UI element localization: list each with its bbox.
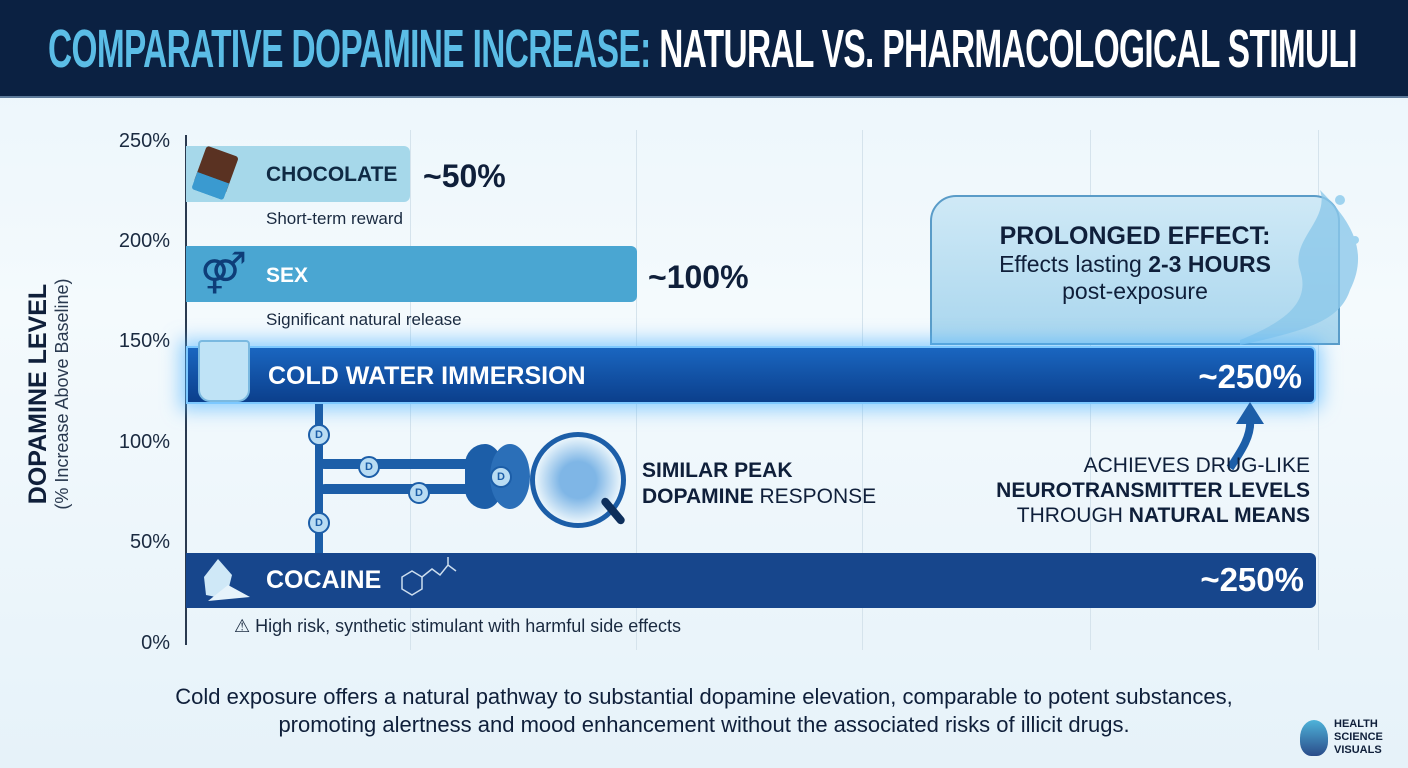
bar: cold water immersion: COLD WATER IMMERSION — [268, 362, 586, 390]
text: drug-like: NEUROTRANSMITTER LEVELS — [996, 479, 1310, 502]
icon: molecule — [401, 557, 456, 596]
bar: chocolate — [186, 146, 410, 202]
y axis: 250% — [119, 130, 170, 152]
icon: chocolate — [191, 146, 239, 200]
bar: cold water immersion: ~250% — [1198, 358, 1302, 395]
logo: VISUALS — [1334, 744, 1382, 756]
value: chocolate: ~50% — [423, 158, 506, 194]
bar: cocaine — [186, 553, 1316, 608]
bar: cocaine: ~250% — [1200, 561, 1304, 598]
y axis: 0% — [141, 632, 170, 654]
bar: sex: SEX — [266, 264, 308, 287]
footer text: promoting alertness and mood enhancement without the associated risks of illicit drugs. — [278, 712, 1130, 737]
y axis — [119, 130, 187, 654]
logo — [1300, 718, 1383, 756]
footer text — [175, 684, 1233, 737]
text: similar peak: DOPAMINE RESPONSE — [642, 485, 876, 508]
caption: sex: Significant natural release — [266, 310, 462, 329]
y axis title: DOPAMINE LEVEL — [24, 284, 52, 504]
icon: gender symbols: ⚤ — [200, 251, 247, 295]
logo: SCIENCE — [1334, 731, 1383, 743]
bar: cocaine: COCAINE — [266, 566, 381, 594]
text: drug-like: THROUGH NATURAL MEANS — [1017, 504, 1310, 527]
dopamine pathway: D — [365, 461, 373, 473]
callout: prolonged effect: post-exposure — [1062, 278, 1208, 304]
icon: crystals — [204, 559, 250, 601]
text: drug-like: ACHIEVES DRUG-LIKE — [1084, 454, 1310, 477]
bar: sex — [186, 246, 637, 302]
arrow: up — [1226, 402, 1264, 470]
y axis: 150% — [119, 330, 170, 352]
grid lines — [312, 130, 1358, 650]
callout: prolonged effect: Effects lasting 2-3 HOURS — [999, 251, 1271, 277]
y axis: 50% — [130, 531, 170, 553]
bar: cold water immersion — [186, 346, 1316, 404]
value: sex: ~100% — [648, 259, 749, 295]
y axis title — [24, 278, 72, 510]
y axis title: (% Increase Above Baseline) — [52, 278, 72, 510]
y axis: 100% — [119, 431, 170, 453]
logo: HEALTH — [1334, 718, 1378, 730]
footer text: Cold exposure offers a natural pathway to substantial dopamine elevation, comparable to potent substances, — [175, 684, 1233, 709]
bar: chocolate: CHOCOLATE — [266, 163, 397, 186]
dopamine pathway: D — [315, 517, 323, 529]
dopamine pathway: D — [497, 471, 505, 483]
icon: brain magnifier — [530, 432, 626, 528]
icon: ice bath — [198, 340, 250, 402]
title: COMPARATIVE DOPAMINE INCREASE: NATURAL VS. PHARMACOLOGICAL STIMULI — [48, 19, 1357, 79]
dopamine pathway: D — [315, 429, 323, 441]
text: similar peak — [642, 459, 876, 508]
y axis: 200% — [119, 230, 170, 252]
dopamine pathway: D — [415, 487, 423, 499]
text: similar peak: SIMILAR PEAK — [642, 459, 793, 482]
icon: water splash — [1240, 190, 1359, 345]
caption: cocaine warning: ⚠ High risk, synthetic stimulant with harmful side effects — [234, 616, 681, 636]
caption: chocolate: Short-term reward — [266, 209, 403, 228]
dopamine pathway — [308, 404, 530, 553]
callout: prolonged effect — [930, 195, 1340, 345]
header banner — [0, 0, 1408, 98]
callout: prolonged effect: PROLONGED EFFECT: — [1000, 222, 1270, 250]
text: drug-like — [996, 454, 1310, 527]
